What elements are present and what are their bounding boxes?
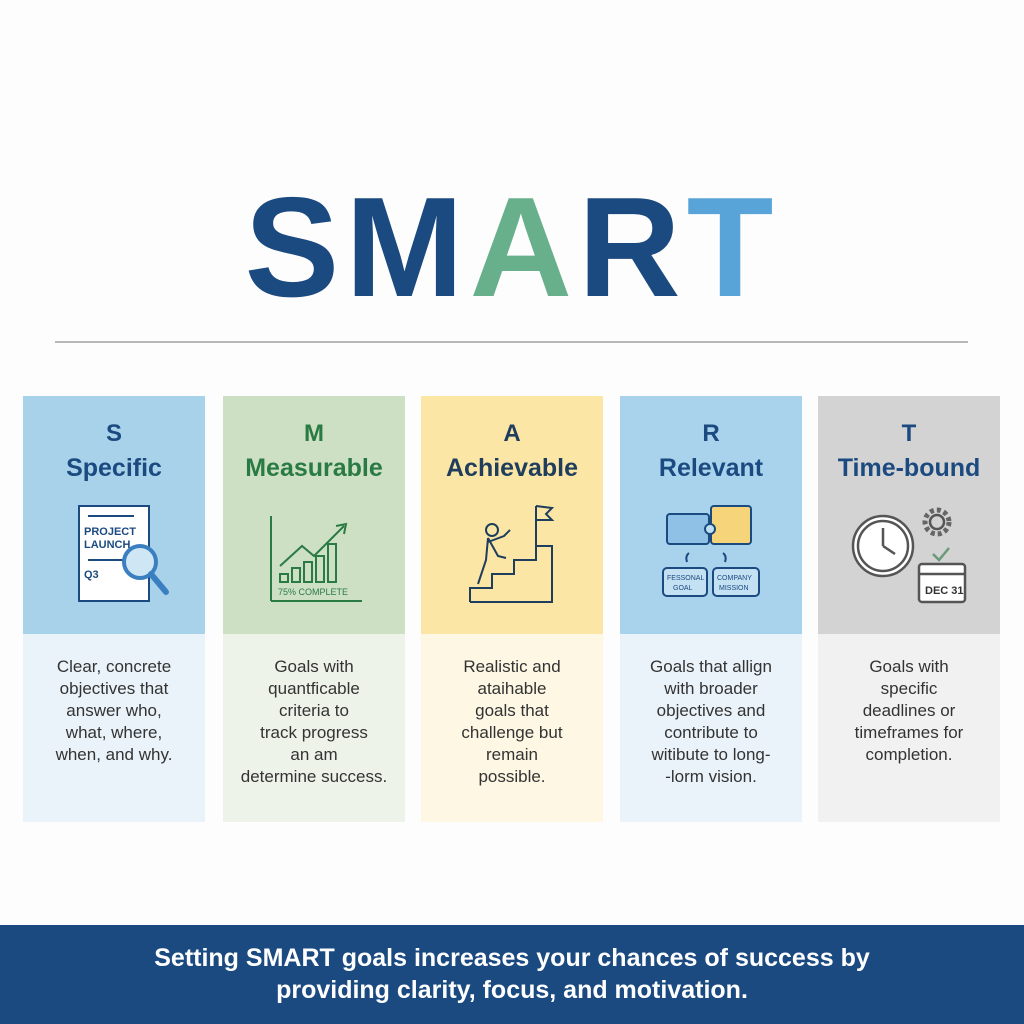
panel: time-bound: deadlines or: [863, 701, 955, 720]
panel: measurable: M: [304, 420, 324, 447]
panel: time-bound: Time-bound: [838, 454, 980, 482]
icon: document magnifier: PROJECT: [84, 526, 136, 538]
panel: achievable: challenge but: [461, 723, 563, 742]
panel: time-bound: completion.: [866, 745, 952, 764]
panel: specific: when, and why.: [56, 745, 172, 764]
panel: specific: Clear, concrete: [57, 657, 171, 676]
panel: time-bound: [818, 396, 1000, 822]
panel: time-bound: timeframes for: [855, 723, 963, 742]
icon: puzzle pieces: COMPANY: [717, 575, 752, 582]
panel: time-bound: Goals with: [869, 657, 949, 676]
panel: relevant: objectives and: [657, 701, 765, 720]
panel: relevant: R: [702, 420, 720, 447]
panel: measurable: Goals with: [274, 657, 354, 676]
panel: measurable: an am: [290, 745, 338, 764]
panel: specific: S: [106, 420, 122, 447]
panel: relevant: witibute to long-: [651, 745, 771, 764]
panel: relevant: Goals that allign: [650, 657, 772, 676]
panel: achievable: goals that: [475, 701, 549, 720]
icon: clock and calendar: [852, 508, 966, 604]
panel: measurable: quantficable: [268, 679, 360, 698]
icon: document magnifier: [78, 505, 169, 602]
panel: measurable: [223, 396, 405, 822]
panel: relevant: with broader: [664, 679, 758, 698]
panel: time-bound: T: [902, 420, 916, 447]
panel: relevant: contribute to: [664, 723, 758, 742]
panel: achievable: remain: [486, 745, 538, 764]
panel: achievable: [421, 396, 603, 822]
panel: achievable: ataihable: [477, 679, 546, 698]
footer banner: Setting SMART goals increases your chances of success by: [154, 944, 870, 972]
icon: document magnifier: LAUNCH: [84, 539, 130, 551]
panel: time-bound: specific: [881, 679, 937, 698]
icon: stairs and flag: [469, 505, 554, 603]
icon: puzzle pieces: GOAL: [673, 585, 693, 592]
panel: specific: what, where,: [66, 723, 162, 742]
icon: growth chart: 75% COMPLETE: [278, 587, 348, 597]
panel: measurable: determine success.: [241, 767, 387, 786]
icon: document magnifier: Q3: [84, 569, 99, 581]
icon: puzzle pieces: [662, 505, 760, 597]
icon: puzzle pieces: FESSONAL: [667, 575, 704, 582]
panel: achievable: A: [503, 420, 521, 447]
panel: relevant: -lorm vision.: [665, 767, 757, 786]
panel: relevant: [620, 396, 802, 822]
panel: relevant: Relevant: [659, 454, 763, 482]
icon: growth chart: [270, 516, 362, 602]
footer banner: providing clarity, focus, and motivation.: [276, 976, 748, 1004]
panel: specific: answer who,: [66, 701, 162, 720]
panel: specific: objectives that: [60, 679, 168, 698]
panel: specific: Specific: [66, 454, 162, 482]
footer banner: [0, 925, 1024, 1024]
panel: specific: [23, 396, 205, 822]
panel: measurable: criteria to: [279, 701, 349, 720]
panel: measurable: track progress: [260, 723, 368, 742]
panel: achievable: Achievable: [446, 454, 578, 482]
panel: achievable: Realistic and: [463, 657, 561, 676]
panel: measurable: Measurable: [245, 454, 383, 482]
title: SMART: [245, 168, 779, 327]
panel: achievable: possible.: [478, 767, 546, 786]
icon: puzzle pieces: MISSION: [719, 585, 749, 592]
icon: clock and calendar: DEC 31: [925, 585, 964, 597]
